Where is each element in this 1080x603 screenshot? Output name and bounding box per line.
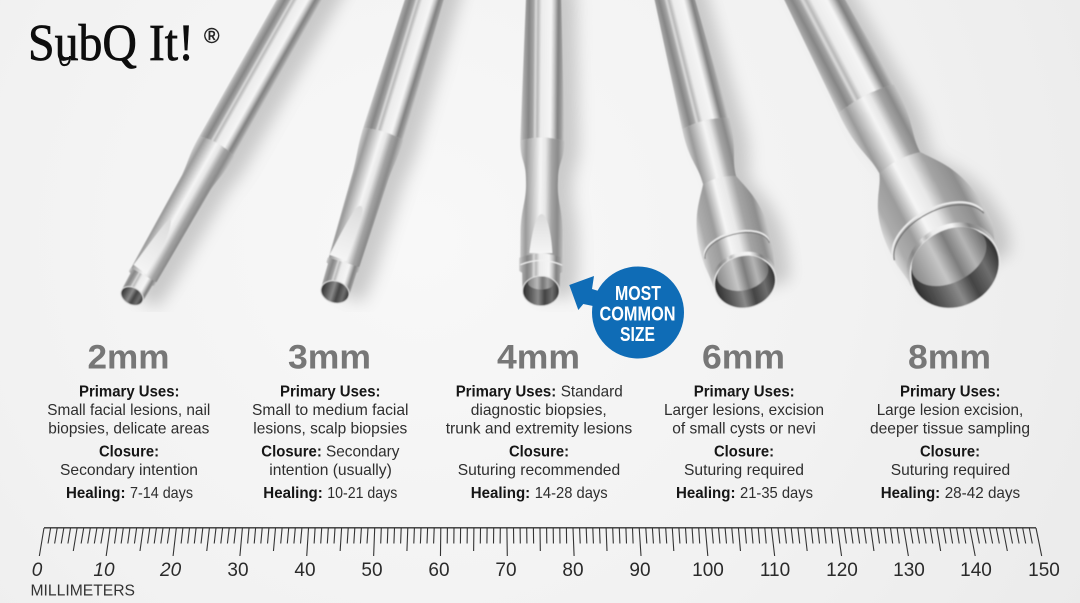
chamfer flat	[329, 201, 365, 262]
callout circle	[592, 266, 684, 358]
primary uses: lesions, scalp biopsies	[253, 421, 407, 438]
primary uses	[47, 384, 210, 438]
instrument: 6mm punch	[635, 0, 786, 316]
flared neck	[681, 115, 744, 191]
healing: 10-21 days	[327, 485, 397, 502]
collar ring	[701, 225, 769, 257]
ruler numbers: 90	[629, 560, 651, 581]
lip	[892, 207, 1015, 325]
primary uses: Small to medium facial	[252, 402, 408, 419]
instrument shadows	[130, 0, 1018, 312]
collar ridge	[520, 260, 562, 265]
primary uses	[252, 384, 408, 438]
tip collar	[119, 268, 157, 303]
shaft	[647, 0, 729, 130]
ruler numbers: 60	[428, 560, 450, 581]
chamfer flat	[529, 214, 553, 253]
healing: 7-14 days	[130, 485, 193, 502]
logo	[28, 15, 220, 72]
primary uses: of small cysts or nevi	[672, 421, 816, 438]
healing	[66, 485, 193, 502]
closure: Closure:	[261, 444, 322, 461]
panel: 3mm details	[252, 338, 408, 502]
ruler numbers: 80	[562, 560, 584, 581]
shaft	[760, 0, 894, 113]
closure: Secondary intention	[60, 462, 198, 479]
panel: 8mm details	[870, 338, 1030, 502]
size heading: 4mm	[497, 338, 580, 376]
chamfer flat	[133, 214, 176, 274]
bore inner wall	[901, 215, 996, 298]
primary uses: Primary Uses:	[456, 384, 556, 401]
healing	[471, 485, 608, 502]
primary uses: Small facial lesions, nail	[47, 402, 210, 419]
collar ring shadow	[701, 226, 769, 259]
size heading: 6mm	[702, 338, 785, 376]
healing: Healing:	[471, 485, 530, 502]
primary uses: Primary Uses:	[694, 384, 795, 401]
primary uses: biopsies, delicate areas	[48, 421, 209, 438]
size heading: 2mm	[88, 338, 170, 376]
callout text: COMMON	[600, 304, 676, 326]
ruler unit label: MILLIMETERS	[30, 583, 135, 600]
logo wordmark: SubQ It!	[28, 15, 194, 72]
callout: most common size	[569, 266, 684, 358]
bore opening	[318, 277, 352, 307]
bulb head	[854, 135, 1002, 290]
logo u drip	[60, 56, 70, 65]
tip collar	[319, 257, 360, 297]
instrument: 4mm punch	[519, 0, 566, 306]
healing: Healing:	[676, 485, 736, 502]
ruler numbers: 100	[692, 560, 724, 581]
instrument: 8mm punch	[743, 0, 1021, 326]
ruler numbers: 10	[93, 560, 115, 581]
callout text	[600, 283, 676, 346]
tapered body	[519, 137, 564, 261]
ruler numbers: 110	[760, 560, 790, 581]
healing: 14-28 days	[535, 485, 608, 502]
closure	[261, 444, 400, 479]
ruler numbers: 70	[495, 560, 517, 581]
closure: Closure:	[920, 444, 980, 461]
collar ring shadow	[882, 190, 984, 260]
closure: Suturing required	[891, 462, 1010, 479]
bore opening	[896, 212, 1014, 324]
healing: 28-42 days	[945, 485, 1020, 502]
bulb head	[684, 169, 779, 289]
closure: Suturing recommended	[458, 462, 620, 479]
instrument: 2mm punch	[110, 0, 356, 313]
primary uses	[870, 384, 1030, 438]
ruler numbers: 140	[960, 560, 992, 581]
ruler numbers	[32, 560, 1060, 581]
primary uses: deeper tissue sampling	[870, 421, 1030, 438]
bore opening	[117, 283, 147, 309]
primary uses: Primary Uses:	[900, 384, 1000, 401]
tapered body	[125, 134, 236, 287]
closure: Closure:	[714, 444, 774, 461]
lip	[707, 245, 782, 315]
healing: Healing:	[66, 485, 126, 502]
millimeter ruler	[30, 528, 1060, 600]
bore inner wall	[713, 250, 772, 296]
ruler numbers: 40	[294, 560, 316, 581]
shaft	[363, 0, 454, 140]
ruler ticks	[39, 528, 1042, 556]
ruler numbers: 20	[159, 560, 182, 581]
collar ring	[881, 188, 982, 258]
ruler numbers: 30	[227, 560, 249, 581]
primary uses: Large lesion excision,	[877, 402, 1023, 419]
closure	[60, 444, 198, 479]
size heading: 8mm	[908, 338, 991, 376]
primary uses: diagnostic biopsies,	[471, 402, 607, 419]
callout text: MOST	[615, 283, 661, 305]
healing	[881, 485, 1020, 502]
primary uses: trunk and extremity lesions	[446, 421, 632, 438]
panel: 2mm details	[47, 338, 210, 502]
closure	[891, 444, 1010, 479]
tip collar	[519, 253, 563, 291]
healing	[676, 485, 813, 502]
bore inner wall	[528, 276, 554, 290]
registered mark: ®	[204, 25, 220, 48]
closure: Closure:	[99, 444, 159, 461]
primary uses: Primary Uses:	[280, 384, 380, 401]
closure: Closure:	[509, 444, 569, 461]
healing: Healing:	[263, 485, 323, 502]
panel: 6mm details	[664, 338, 824, 502]
closure: Secondary	[326, 444, 400, 461]
closure	[684, 444, 804, 479]
size heading: 3mm	[288, 338, 371, 376]
ruler numbers: 120	[826, 560, 858, 581]
primary uses	[446, 384, 632, 438]
primary uses	[664, 384, 824, 438]
healing: Healing:	[881, 485, 940, 502]
ruler numbers: 130	[893, 560, 925, 581]
ruler numbers: 50	[361, 560, 383, 581]
closure: intention (usually)	[269, 462, 392, 479]
bore opening	[522, 276, 560, 306]
callout text: SIZE	[620, 324, 655, 346]
closure	[458, 444, 620, 479]
callout arrow	[569, 276, 602, 310]
closure: Suturing required	[684, 462, 804, 479]
primary uses: Standard	[561, 384, 623, 401]
instrument: 3mm punch	[312, 0, 454, 309]
ruler numbers: 0	[32, 560, 43, 581]
ruler numbers: 150	[1028, 560, 1060, 581]
primary uses: Primary Uses:	[79, 384, 180, 401]
bore opening	[709, 249, 781, 315]
panel: 4mm details	[446, 338, 632, 502]
shaft	[520, 0, 566, 141]
shaft	[199, 0, 356, 156]
primary uses: Larger lesions, excision	[664, 402, 824, 419]
healing: 21-35 days	[740, 485, 813, 502]
healing	[263, 485, 397, 502]
flared neck	[837, 81, 931, 183]
tapered body	[324, 126, 404, 269]
